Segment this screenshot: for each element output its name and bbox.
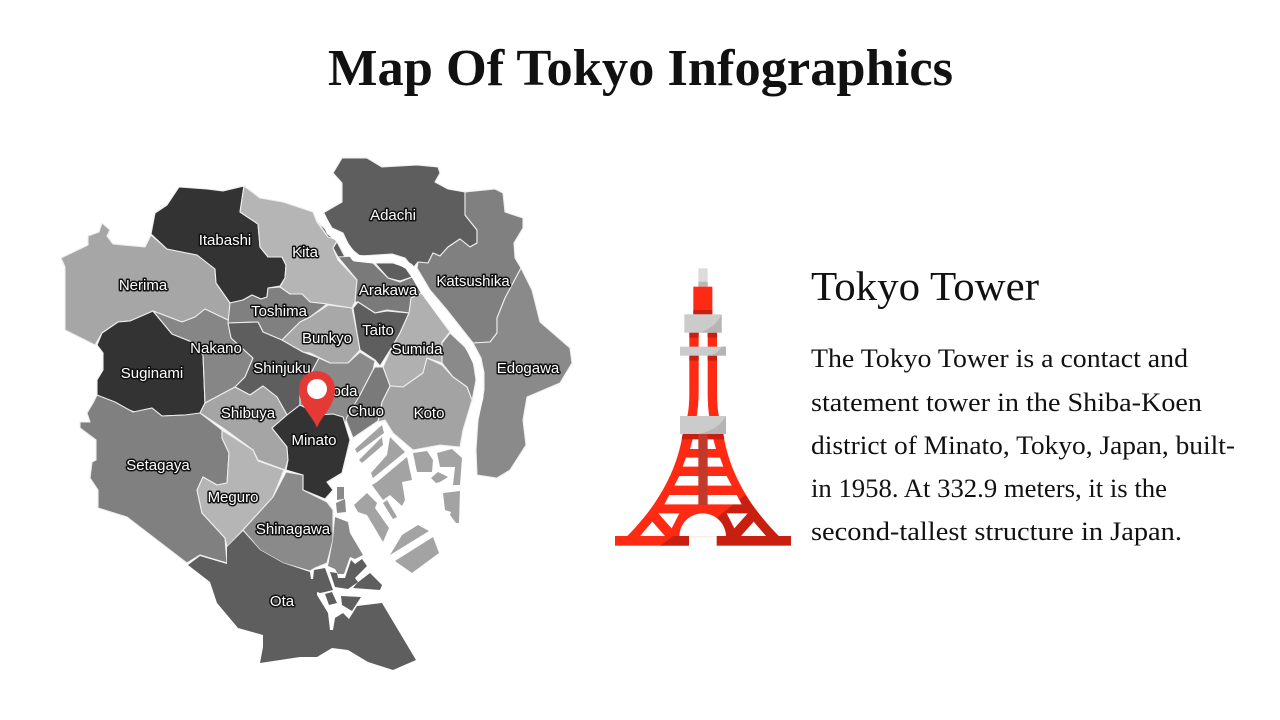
label: Kita: Kita: [292, 244, 319, 261]
label: Minato: Minato: [291, 432, 337, 449]
text block: description: [811, 344, 1235, 546]
label: Koto: Koto: [414, 405, 444, 422]
text block: description: second-tallest structure in Japan.: [811, 517, 1182, 546]
ward: Ota: [188, 531, 416, 670]
ward: Bunkyo: [282, 305, 360, 363]
ward: Kita sliver: [318, 222, 345, 257]
ward: Chuo: [346, 367, 390, 438]
label: Suginami: Suginami: [121, 365, 183, 382]
ward: Sumida: [383, 293, 450, 387]
label: Setagaya: Setagaya: [126, 457, 190, 474]
label: Taito: Taito: [362, 322, 394, 339]
label: Ota: Ota: [270, 593, 295, 610]
river: [320, 212, 480, 430]
label: Katsushika: Katsushika: [436, 273, 510, 290]
label: Shinagawa: Shinagawa: [256, 521, 331, 538]
label: Nerima: Nerima: [119, 277, 168, 294]
bay islands: [354, 425, 462, 573]
ward: Taito: [353, 302, 409, 366]
text block: description: district of Minato, Tokyo, Japan, built-: [811, 431, 1235, 460]
ward: Meguro: [197, 430, 284, 547]
text block: description: statement tower in the Shiba-Koen: [811, 388, 1202, 417]
ward: Toshima: [228, 287, 327, 340]
map of Tokyo wards: [61, 158, 572, 670]
text block: description: The Tokyo Tower is a contact and: [811, 344, 1188, 373]
ward: Katsushika: [417, 189, 523, 343]
ward: Shinagawa: [243, 472, 333, 571]
label: Arakawa: Arakawa: [359, 282, 418, 299]
text block: description: in 1958. At 332.9 meters, it is the: [811, 474, 1167, 503]
label: Meguro: Meguro: [208, 489, 258, 506]
label: Chuo: Chuo: [348, 403, 384, 420]
label: Bunkyo: Bunkyo: [302, 330, 352, 347]
label: Adachi: Adachi: [370, 207, 416, 224]
ward: Edogawa: [473, 268, 572, 478]
label: Edogawa: Edogawa: [497, 360, 560, 377]
ward: Itabashi: [151, 186, 286, 303]
ward: Koto: [378, 358, 472, 450]
ward: Nakano: [153, 309, 253, 403]
ward: Koto east: [442, 333, 476, 401]
ward: Shinjuku: [228, 322, 319, 415]
label: Nakano: Nakano: [190, 340, 242, 357]
label: Shibuya: Shibuya: [221, 405, 276, 422]
ward: Suginami: [97, 311, 205, 416]
ward: Adachi: [323, 158, 477, 268]
southern bay islands: [328, 487, 363, 574]
icon: Tokyo Tower: [615, 268, 791, 546]
label: Itabashi: Itabashi: [199, 232, 251, 249]
label: Shinjuku: Shinjuku: [253, 360, 311, 377]
heading: Tokyo Tower: Tokyo Tower: [811, 263, 1039, 309]
label: Chiyoda: Chiyoda: [302, 383, 358, 400]
Ota bay islands: [325, 559, 382, 611]
ward: Minato: [272, 405, 350, 499]
title: Map Of Tokyo Infographics: [328, 40, 953, 97]
ward: Arakawa: [338, 256, 422, 313]
ward: Setagaya: [80, 395, 229, 563]
label: Toshima: Toshima: [251, 303, 308, 320]
ward: Kita: [240, 186, 357, 308]
ward: Adachi south sliver: [375, 263, 412, 281]
label: Sumida: Sumida: [392, 341, 443, 358]
ward: Shibuya: [200, 386, 288, 470]
ward: Chiyoda: [300, 352, 375, 423]
ward: Nerima: [61, 223, 230, 345]
icon: location pin: [299, 371, 335, 428]
